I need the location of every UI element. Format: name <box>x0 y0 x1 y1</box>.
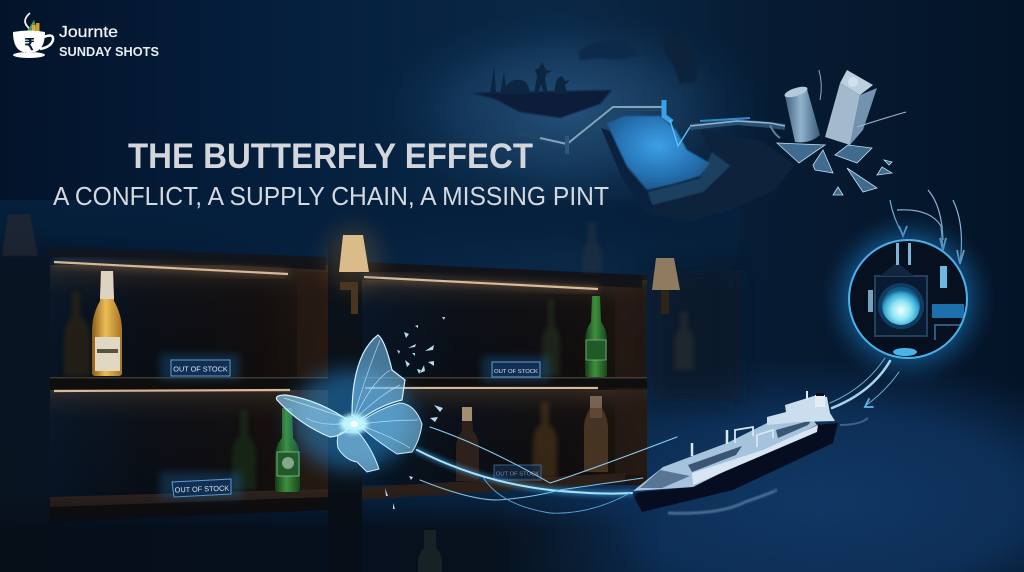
blurred background bottles <box>64 222 694 490</box>
out of stock sign 3: OUT OF STOCK <box>175 484 229 494</box>
butterfly body spark <box>340 414 368 434</box>
reactor ring <box>849 240 967 358</box>
cranes <box>692 430 727 456</box>
reactor core <box>878 283 924 329</box>
logo subtitle: SUNDAY SHOTS <box>59 45 159 59</box>
upper left wing <box>276 395 352 437</box>
out of stock sign 3 <box>160 472 242 500</box>
red sea shadow coast <box>601 128 652 214</box>
icon: glowing reactor <box>820 211 996 387</box>
icon: glass butterfly <box>276 317 677 513</box>
bottle: green lager, top right <box>585 296 607 377</box>
top fade into background <box>0 200 740 262</box>
deck <box>633 420 817 491</box>
out of stock sign 4, faded: OUT OF STOCK <box>496 472 539 478</box>
glass fragments <box>385 317 445 509</box>
hull <box>632 423 838 512</box>
shattered glass shards <box>777 143 892 195</box>
map glow <box>370 5 770 215</box>
out of stock sign 1: OUT OF STOCK <box>173 364 228 374</box>
centre cabinet back wall <box>362 275 647 485</box>
logo: Journte Sunday Shots <box>13 13 159 59</box>
cabinet outer frame <box>0 212 50 572</box>
wing veins <box>284 340 418 448</box>
out of stock sign 2: OUT OF STOCK <box>494 369 538 375</box>
icon: milk carton <box>819 70 906 145</box>
bottle: golden lager <box>92 271 122 376</box>
lower left wing <box>337 432 379 472</box>
out of stock sign 1 <box>160 354 240 380</box>
icon: coffee cup with rupee <box>13 13 53 58</box>
bottom shelf fade <box>0 490 660 572</box>
upper shelf tops <box>50 246 326 270</box>
soldiers silhouette and skyline <box>490 62 570 94</box>
reactor body <box>850 241 966 357</box>
pipeline <box>517 100 785 154</box>
upper right wing <box>352 335 405 420</box>
flow arrows from reactor to ship <box>830 358 899 408</box>
panel: tanker ship <box>632 391 868 513</box>
butterfly glow <box>292 370 412 470</box>
wake <box>668 490 776 513</box>
title: THE BUTTERFLY EFFECT <box>128 137 533 176</box>
panel: left and centre liquor shelves <box>0 200 740 572</box>
subtitle: A CONFLICT, A SUPPLY CHAIN, A MISSING PINT <box>53 181 609 211</box>
reactor halo <box>820 211 996 387</box>
panel: middle east map <box>370 5 795 222</box>
wall lamps <box>2 214 680 314</box>
bottle: green lager, lower shelf <box>275 408 300 492</box>
out of stock sign 4, faded <box>494 465 541 480</box>
lower right wing <box>360 403 422 454</box>
light trails <box>417 427 677 513</box>
flat deck plate <box>692 425 818 485</box>
deck pipework <box>688 446 742 472</box>
sea <box>480 350 1024 572</box>
bridge <box>767 395 835 425</box>
left cabinet back wall <box>50 262 328 502</box>
out of stock sign 2 <box>482 356 550 382</box>
land and sea shapes <box>472 32 795 222</box>
icon: drink can <box>783 84 820 142</box>
logo wordmark: Journte <box>59 24 118 41</box>
flow arrows from shards to reactor <box>890 190 964 264</box>
LED strip lights <box>54 262 288 274</box>
blurred bottle below shelf <box>418 530 442 572</box>
icon: coffee cup with rupee: ₹ <box>24 37 35 54</box>
bottle: brown ale <box>456 396 608 481</box>
shelf boards <box>50 378 328 390</box>
arabian peninsula, highlighted <box>607 116 710 190</box>
